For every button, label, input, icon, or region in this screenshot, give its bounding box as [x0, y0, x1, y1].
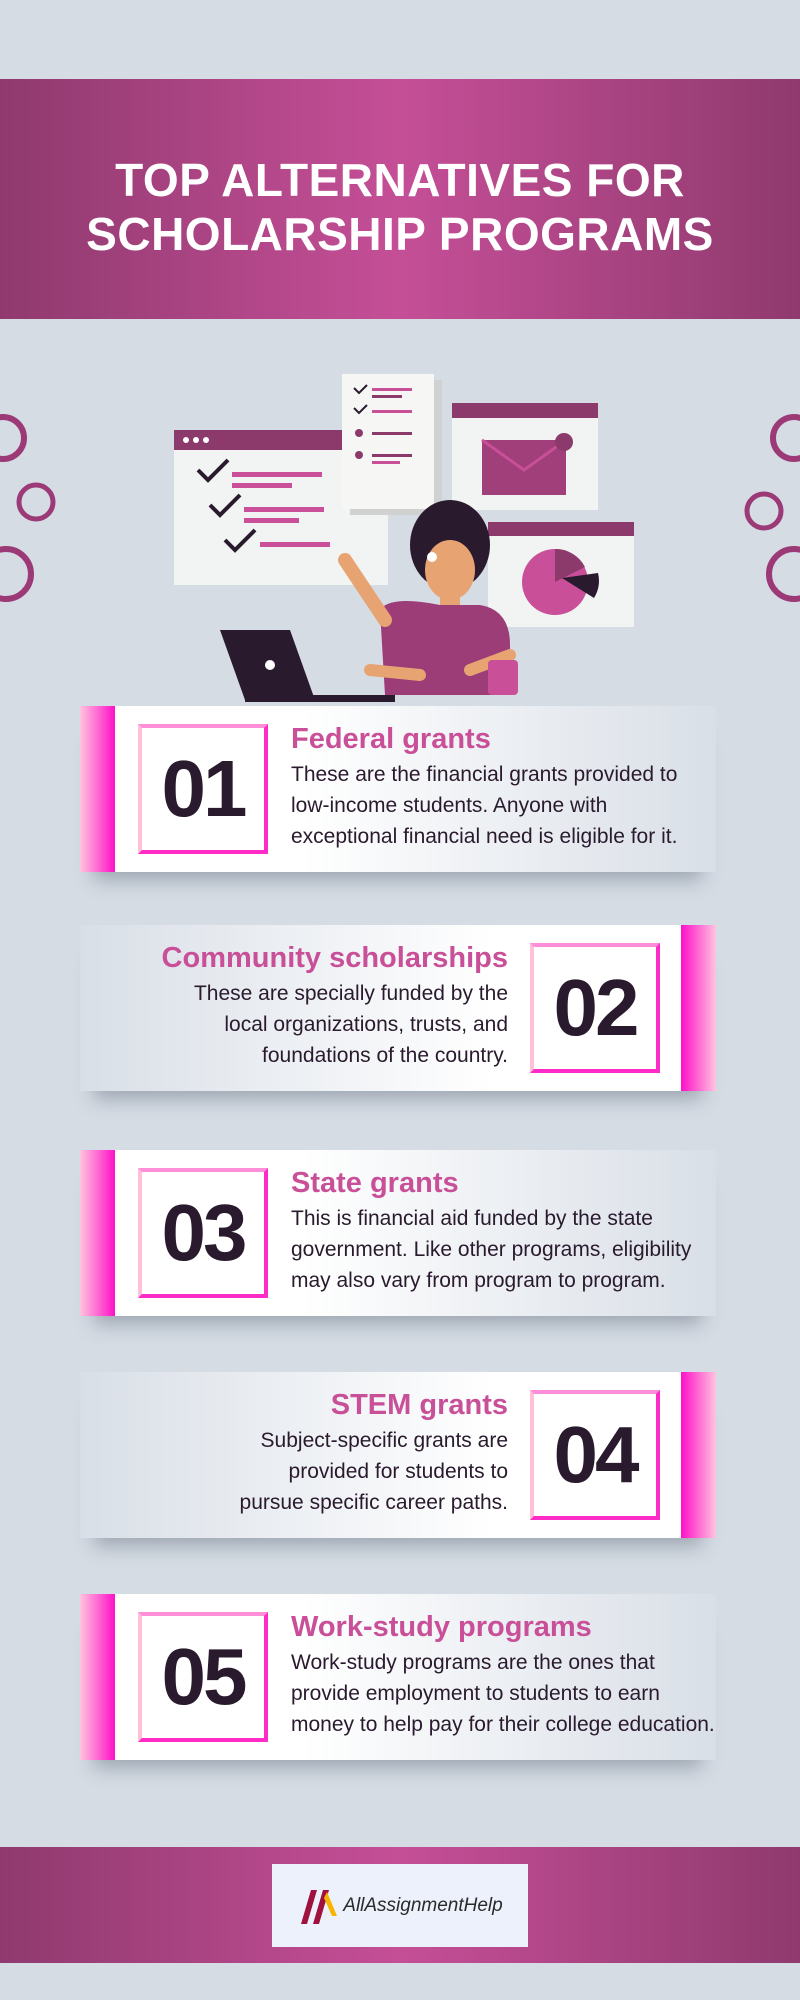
decorative circles right	[744, 414, 800, 602]
card 02: Community scholarships	[80, 925, 716, 1091]
number box 04: 04	[554, 1410, 636, 1499]
number box 03: 03	[162, 1188, 244, 1277]
text: federal grants: These are the financial grants provided to	[291, 763, 677, 786]
text: state grants: may also vary from program to program.	[291, 1269, 666, 1292]
text: federal grants: low-income students. Anyone with	[291, 794, 607, 817]
number box 01	[138, 724, 268, 854]
decorative circles left	[0, 414, 56, 602]
text: state grants: State grants	[291, 1167, 459, 1199]
number box 01: 01	[162, 744, 244, 833]
header banner: SCHOLARSHIP PROGRAMS	[86, 208, 714, 260]
text: stem grants: pursue specific career paths.	[240, 1491, 508, 1514]
number box 04	[530, 1390, 660, 1520]
text: stem grants	[240, 1389, 508, 1514]
logo box	[272, 1864, 528, 1947]
laptop	[220, 630, 395, 702]
card 05: Work-study programs	[80, 1594, 716, 1760]
text: work-study programs: Work-study programs	[291, 1611, 592, 1643]
header banner: TOP ALTERNATIVES FOR	[115, 154, 685, 206]
card 03: State grants	[80, 1150, 716, 1316]
text: community scholarships	[162, 942, 508, 1067]
text: work-study programs: Work-study programs are the ones that	[291, 1651, 655, 1674]
number box 05: 05	[162, 1632, 244, 1721]
text: community scholarships: Community scholarships	[162, 942, 508, 974]
text: community scholarships: foundations of the country.	[262, 1044, 508, 1067]
paper list	[342, 374, 442, 515]
logo box: AllAssignmentHelp	[343, 1894, 503, 1916]
number box 02	[530, 943, 660, 1073]
number box 05	[138, 1612, 268, 1742]
icon: logo mark	[301, 1890, 337, 1924]
card 01: Federal grants	[80, 706, 716, 872]
text: federal grants: exceptional financial need is eligible for it.	[291, 825, 677, 848]
text: stem grants: Subject-specific grants are	[261, 1429, 508, 1452]
text: community scholarships: These are specially funded by the	[194, 982, 508, 1005]
text: work-study programs: provide employment to students to earn	[291, 1682, 660, 1705]
text: work-study programs	[291, 1611, 715, 1736]
email window	[452, 403, 598, 510]
text: work-study programs: money to help pay for their college education.	[291, 1713, 715, 1736]
text: community scholarships: local organizations, trusts, and	[224, 1013, 508, 1036]
number box 02: 02	[554, 963, 636, 1052]
text: state grants: This is financial aid funded by the state	[291, 1207, 653, 1230]
woman	[345, 500, 518, 695]
footer banner	[0, 1847, 800, 1963]
card 04: STEM grants	[80, 1372, 716, 1538]
number box 03	[138, 1168, 268, 1298]
header banner	[0, 79, 800, 319]
window checklist	[174, 430, 388, 585]
text: stem grants: provided for students to	[289, 1460, 508, 1483]
text: federal grants: Federal grants	[291, 723, 491, 755]
text: stem grants: STEM grants	[331, 1389, 508, 1421]
text: federal grants	[291, 723, 677, 848]
text: state grants	[291, 1167, 692, 1292]
text: state grants: government. Like other programs, eligibility	[291, 1238, 691, 1261]
pie chart window	[488, 522, 634, 627]
illustration: woman at laptop with checklists	[174, 374, 634, 702]
